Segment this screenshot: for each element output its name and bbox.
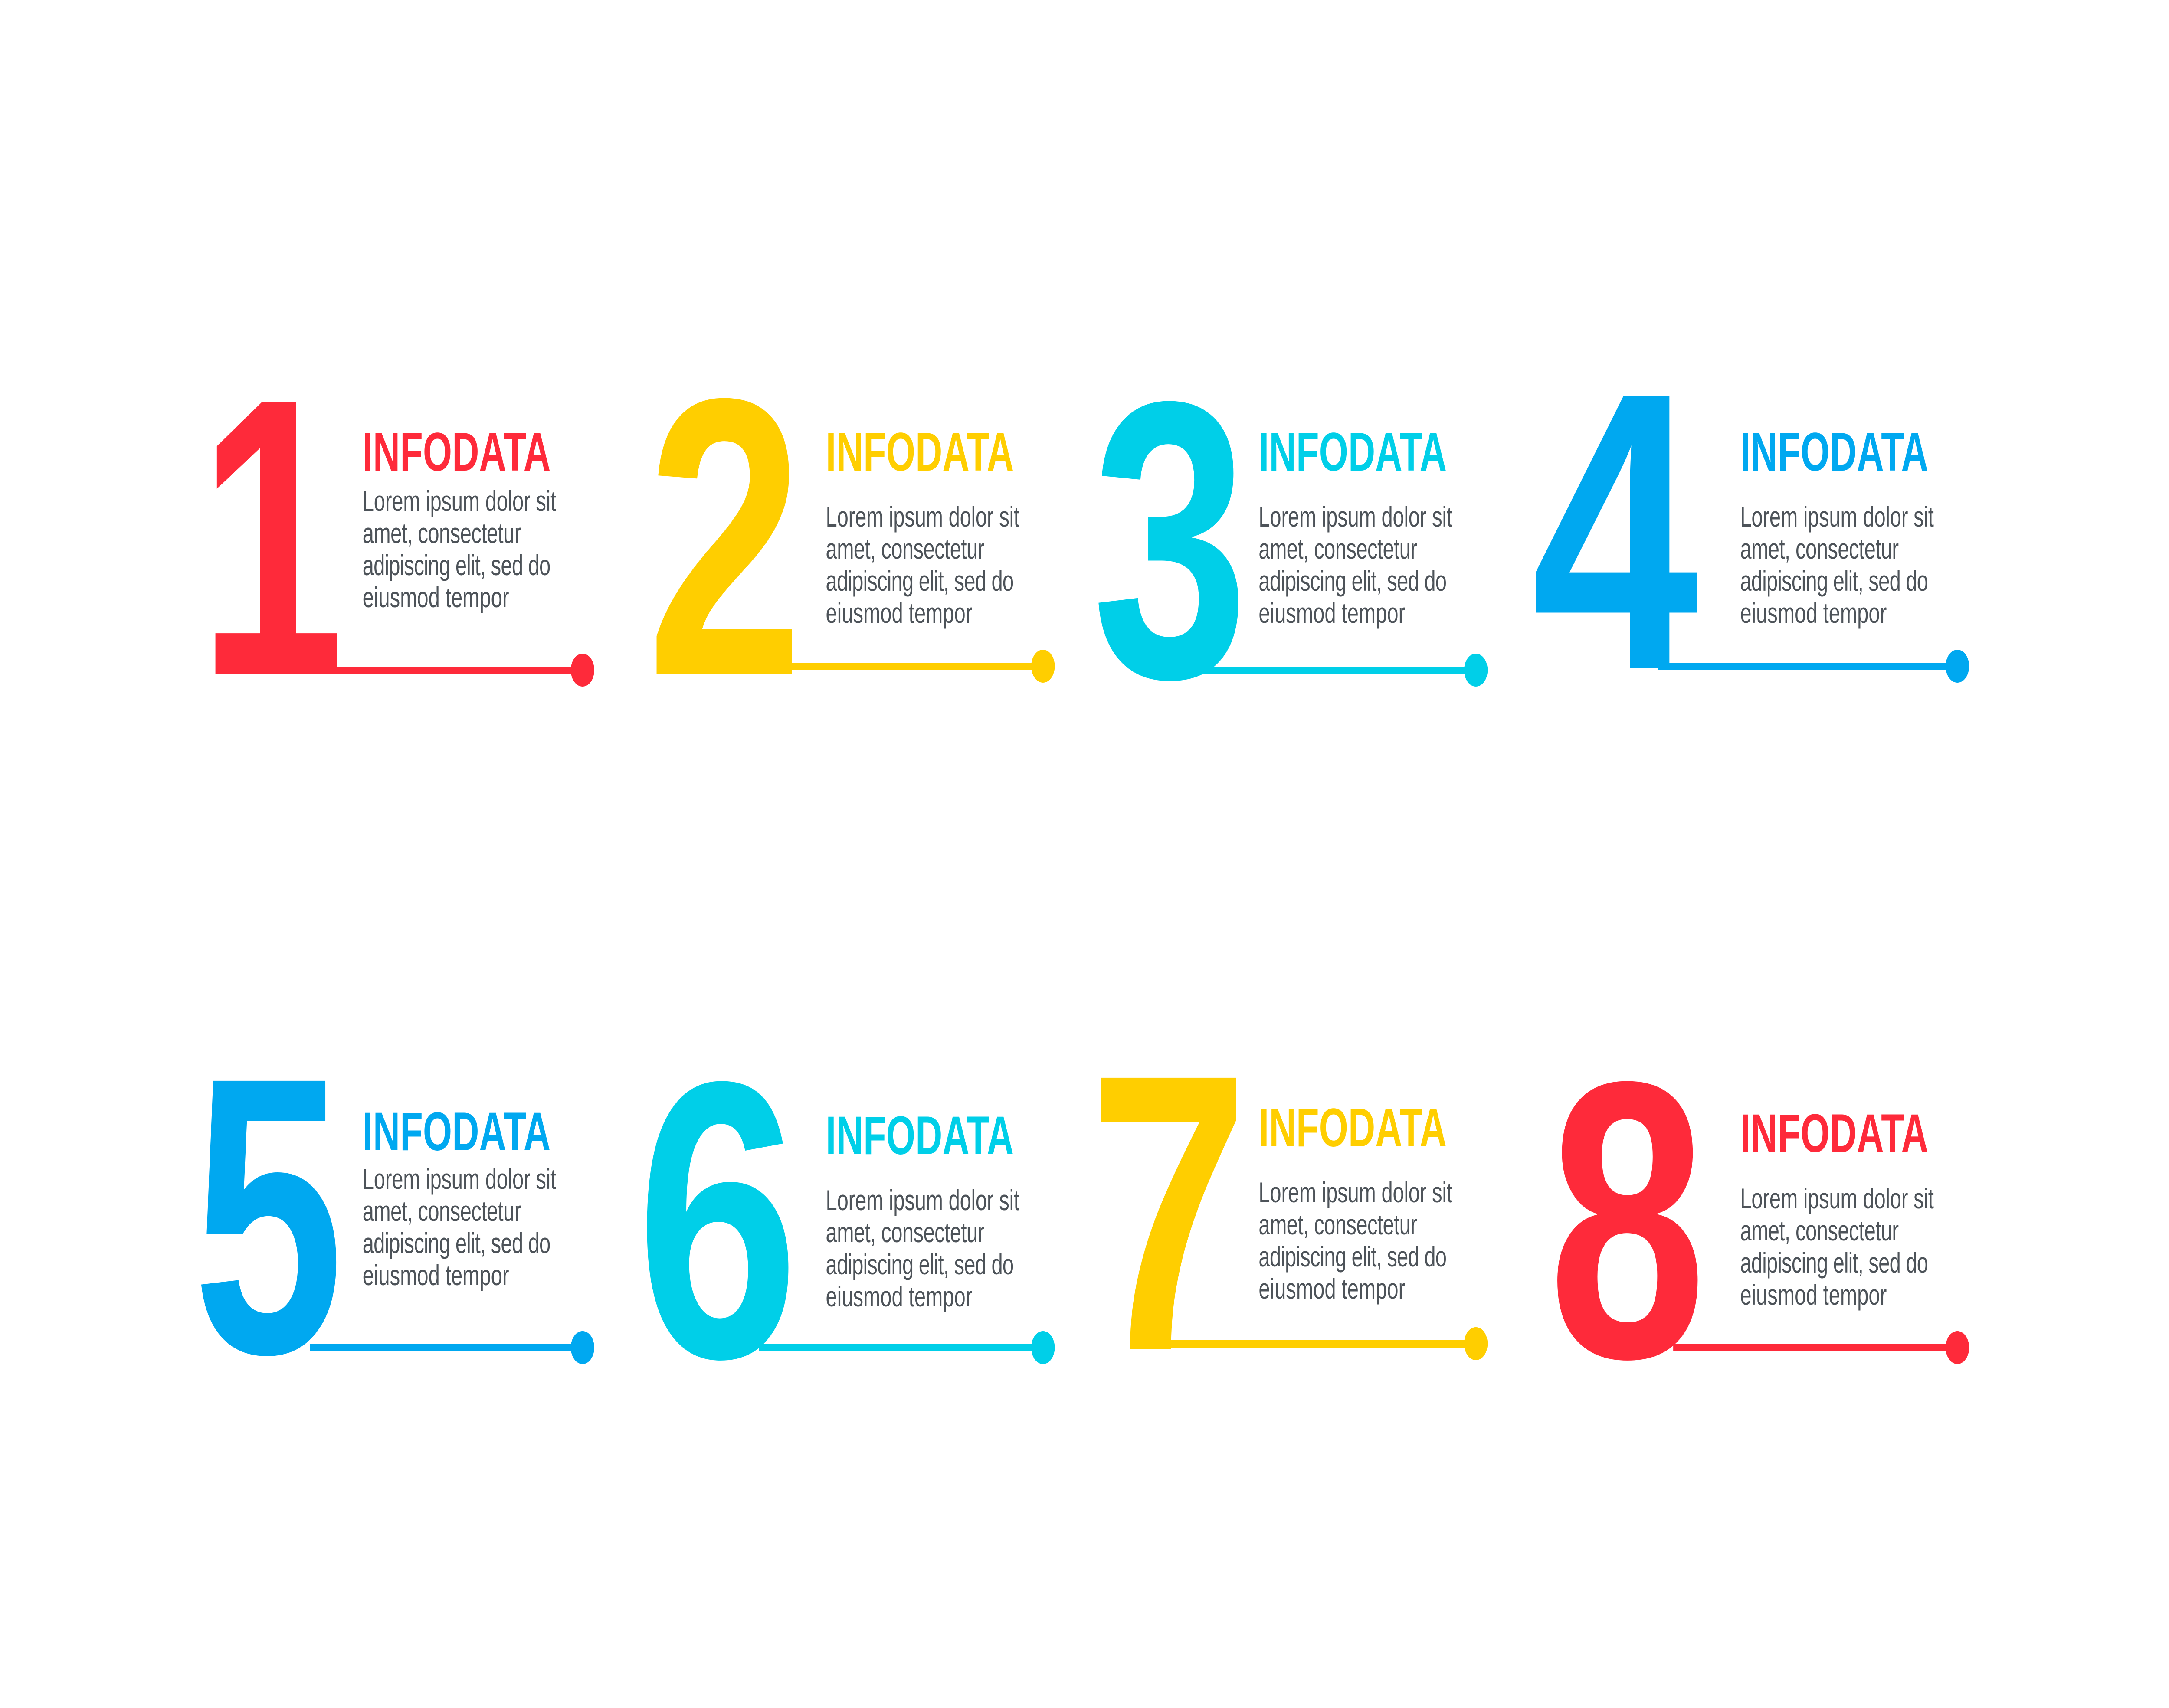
title 1: INFODATA bbox=[363, 422, 550, 483]
connector line 8 bbox=[1673, 1331, 1969, 1364]
body text 5: Lorem ipsum dolor sit bbox=[363, 1163, 556, 1195]
body text 7: Lorem ipsum dolor sit bbox=[1258, 1177, 1452, 1209]
connector line 4 bbox=[1658, 650, 1969, 683]
body text 3: Lorem ipsum dolor sit bbox=[1258, 501, 1452, 533]
body text 3: amet, consectetur bbox=[1258, 533, 1417, 565]
connector line 1 bbox=[310, 654, 594, 687]
body text 8: Lorem ipsum dolor sit bbox=[1740, 1183, 1934, 1215]
body text 5: amet, consectetur bbox=[363, 1195, 521, 1227]
body text 8: adipiscing elit, sed do bbox=[1740, 1247, 1928, 1279]
number 2: 2 bbox=[647, 316, 803, 757]
body text 1: Lorem ipsum dolor sit bbox=[363, 485, 556, 517]
body text 1: eiusmod tempor bbox=[363, 582, 509, 614]
body text 3: adipiscing elit, sed do bbox=[1258, 565, 1447, 597]
number 8: 8 bbox=[1548, 999, 1707, 1440]
title 4: INFODATA bbox=[1740, 422, 1928, 483]
body text 7: eiusmod tempor bbox=[1258, 1273, 1405, 1305]
item 2 bbox=[647, 316, 1055, 757]
body text 1: amet, consectetur bbox=[363, 517, 521, 550]
title 6: INFODATA bbox=[826, 1106, 1014, 1166]
number 6: 6 bbox=[636, 999, 799, 1440]
body text 4: eiusmod tempor bbox=[1740, 597, 1887, 629]
connector line 3 bbox=[1193, 654, 1488, 687]
body text 5: eiusmod tempor bbox=[363, 1260, 509, 1292]
body text 4 bbox=[1740, 501, 1934, 629]
body text 7 bbox=[1258, 1177, 1452, 1305]
title 5: INFODATA bbox=[363, 1102, 550, 1162]
item 1 bbox=[199, 316, 594, 757]
item 7 bbox=[1089, 992, 1488, 1433]
title 7: INFODATA bbox=[1258, 1098, 1447, 1158]
item 3 bbox=[1092, 319, 1488, 760]
number 3: 3 bbox=[1092, 319, 1248, 760]
number 1: 1 bbox=[199, 316, 344, 757]
body text 4: Lorem ipsum dolor sit bbox=[1740, 501, 1934, 533]
body text 6: Lorem ipsum dolor sit bbox=[826, 1184, 1019, 1217]
body text 6 bbox=[826, 1184, 1019, 1313]
body text 8: amet, consectetur bbox=[1740, 1215, 1899, 1247]
body text 8 bbox=[1740, 1183, 1934, 1311]
body text 7: adipiscing elit, sed do bbox=[1258, 1241, 1447, 1273]
connector line 2 bbox=[775, 650, 1055, 683]
body text 2: amet, consectetur bbox=[826, 533, 984, 565]
item 8 bbox=[1548, 999, 1969, 1440]
item 6 bbox=[636, 999, 1055, 1440]
body text 2: eiusmod tempor bbox=[826, 597, 972, 629]
connector line 7 bbox=[1159, 1327, 1488, 1360]
body text 1 bbox=[363, 485, 556, 614]
body text 2: adipiscing elit, sed do bbox=[826, 565, 1014, 597]
title 2: INFODATA bbox=[826, 422, 1014, 483]
body text 6: amet, consectetur bbox=[826, 1217, 984, 1249]
number 4: 4 bbox=[1531, 311, 1700, 752]
number 7: 7 bbox=[1089, 992, 1248, 1433]
body text 6: adipiscing elit, sed do bbox=[826, 1249, 1014, 1281]
body text 7: amet, consectetur bbox=[1258, 1209, 1417, 1241]
connector line 6 bbox=[759, 1331, 1055, 1364]
body text 2 bbox=[826, 501, 1019, 629]
title 8: INFODATA bbox=[1740, 1103, 1928, 1164]
body text 3 bbox=[1258, 501, 1452, 629]
body text 5: adipiscing elit, sed do bbox=[363, 1227, 550, 1260]
item 4 bbox=[1531, 311, 1969, 752]
title 3: INFODATA bbox=[1258, 422, 1447, 483]
body text 4: adipiscing elit, sed do bbox=[1740, 565, 1928, 597]
body text 6: eiusmod tempor bbox=[826, 1281, 972, 1313]
body text 8: eiusmod tempor bbox=[1740, 1279, 1887, 1311]
body text 2: Lorem ipsum dolor sit bbox=[826, 501, 1019, 533]
connector line 5 bbox=[310, 1331, 594, 1364]
item 5 bbox=[193, 995, 594, 1436]
number 5: 5 bbox=[193, 995, 344, 1436]
body text 1: adipiscing elit, sed do bbox=[363, 550, 550, 582]
body text 5 bbox=[363, 1163, 556, 1292]
body text 4: amet, consectetur bbox=[1740, 533, 1899, 565]
body text 3: eiusmod tempor bbox=[1258, 597, 1405, 629]
